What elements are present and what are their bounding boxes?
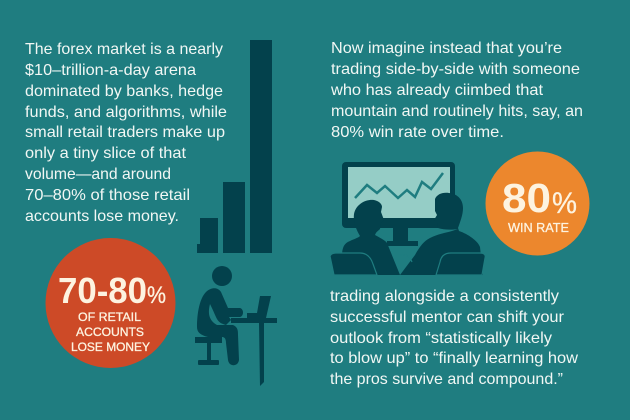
text block: forex market: $10–trillion-a-day arena	[25, 62, 196, 79]
callout: 70-80%: %	[147, 282, 166, 309]
text block: mentor	[330, 288, 578, 388]
left chair	[330, 253, 377, 275]
text block: forex market	[25, 41, 227, 225]
text block: mentor: to blow up” to “finally learning how	[330, 350, 578, 367]
chart line	[355, 173, 443, 198]
left person	[342, 200, 400, 275]
text block: forex market: 70–80% of those retail	[25, 187, 190, 204]
callout: 80% win rate: %	[552, 187, 577, 220]
text block: mentor: the pros survive and compound.”	[330, 371, 563, 388]
text block: forex market: only a tiny slice of that	[25, 145, 187, 162]
text block: forex market: dominated by banks, hedge	[25, 83, 223, 100]
text block: forex market: funds, and algorithms, while	[25, 104, 227, 121]
right person	[400, 193, 483, 275]
text block: forex market: small retail traders make up	[25, 124, 225, 141]
callout: 80% win rate	[486, 152, 590, 256]
text block: imagine: mountain and routinely hits, say, an	[331, 103, 583, 120]
icon: two traders at a monitor	[330, 162, 485, 275]
callout: 80% win rate: 80	[502, 175, 551, 221]
text block: imagine	[330, 40, 583, 141]
text block: imagine: Now imagine instead that you’re	[331, 40, 562, 57]
callout: 70-80%: LOSE MONEY	[71, 340, 150, 354]
callout: 70-80%	[46, 238, 176, 368]
text block: forex market: accounts lose money.	[25, 208, 179, 225]
callout: 70-80%: 70-80	[58, 270, 147, 311]
text block: imagine: trading side-by-side with someone	[331, 61, 580, 78]
text block: imagine: who has already ciimbed that	[330, 82, 544, 99]
text block: mentor: trading alongside a consistently	[330, 288, 559, 305]
callout: 70-80%: ACCOUNTS	[76, 325, 144, 339]
icon: person at laptop	[195, 266, 277, 386]
right chair	[436, 253, 485, 275]
callout: 80% win rate: WIN RATE	[508, 220, 569, 235]
text block: mentor: successful mentor can shift your	[330, 309, 565, 326]
monitor	[342, 162, 455, 246]
bar chart	[197, 40, 272, 253]
text block: forex market: volume—and around	[25, 166, 171, 183]
arm detail	[400, 255, 412, 262]
callout: 70-80%: OF RETAIL	[78, 310, 141, 324]
text block: mentor: outlook from “statistically likely	[330, 330, 552, 347]
text block: imagine: 80% win rate over time.	[331, 124, 504, 141]
text block: forex market: The forex market is a nearly	[25, 41, 223, 58]
